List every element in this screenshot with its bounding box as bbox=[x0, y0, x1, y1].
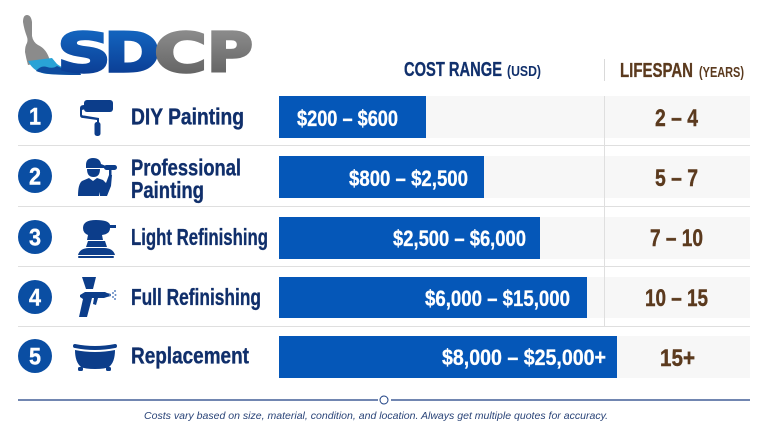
logo letter D: D bbox=[104, 22, 160, 84]
row 4: Full Refinishing bbox=[18, 277, 708, 318]
lifespan value: 5 – 7 bbox=[655, 165, 698, 192]
number badge 5: 5 bbox=[29, 344, 41, 370]
label bbox=[131, 154, 241, 203]
logo letter P: P bbox=[207, 22, 253, 84]
cost bar bbox=[279, 96, 426, 138]
icon: spray gun bbox=[79, 277, 116, 317]
cost bar bbox=[279, 217, 540, 259]
heading: cost range: (USD) bbox=[507, 63, 541, 80]
label: DIY Painting bbox=[131, 104, 244, 130]
cost bar: $200 – $600 bbox=[297, 106, 398, 131]
lifespan value: 10 – 15 bbox=[645, 285, 708, 312]
label: Painting bbox=[131, 177, 204, 203]
row 3: Light Refinishing bbox=[18, 217, 703, 259]
cost bar: $6,000 – $15,000 bbox=[425, 286, 570, 311]
logo letter C: C bbox=[154, 22, 207, 84]
label: Professional bbox=[131, 154, 241, 180]
heading: lifespan: (YEARS) bbox=[699, 64, 744, 81]
number badge 3 bbox=[18, 220, 52, 254]
number badge 4: 4 bbox=[29, 284, 42, 312]
label: Replacement bbox=[131, 342, 249, 368]
number badge 1 bbox=[18, 99, 52, 133]
cost bar bbox=[279, 156, 484, 198]
cost bar: $800 – $2,500 bbox=[349, 166, 468, 191]
icon: paint roller bbox=[80, 100, 113, 136]
number badge 2: 2 bbox=[29, 164, 41, 190]
number badge 4 bbox=[18, 280, 52, 314]
cost bar bbox=[279, 277, 587, 318]
cost bar: $2,500 – $6,000 bbox=[393, 226, 526, 251]
label: Full Refinishing bbox=[131, 284, 261, 310]
number badge 5 bbox=[18, 339, 52, 373]
cost bar: $8,000 – $25,000+ bbox=[442, 345, 606, 370]
heading: cost range: COST RANGE bbox=[404, 59, 502, 81]
logo letter S: S bbox=[57, 22, 111, 84]
heading: lifespan: LIFESPAN bbox=[620, 60, 693, 82]
number badge 2 bbox=[18, 159, 52, 193]
lifespan value: 15+ bbox=[660, 345, 695, 372]
cost bar bbox=[279, 336, 617, 378]
number badge 1: 1 bbox=[29, 104, 41, 130]
row 2: Professional Painting bbox=[18, 154, 698, 203]
icon: bathtub bbox=[73, 344, 117, 371]
lifespan value: 2 – 4 bbox=[655, 105, 699, 132]
icon: orbital sander bbox=[78, 220, 116, 258]
logo: SDCP bbox=[23, 15, 253, 84]
icon: painter bbox=[78, 158, 117, 196]
number badge 3: 3 bbox=[29, 224, 41, 252]
lifespan value: 7 – 10 bbox=[650, 225, 703, 252]
row 1: DIY Painting bbox=[18, 96, 699, 138]
footnote: Costs vary based on size, material, condition, and location. Always get multiple quotes for accuracy. bbox=[144, 410, 608, 422]
row 5: Replacement bbox=[18, 336, 695, 378]
label: Light Refinishing bbox=[131, 224, 268, 250]
icon: paint brush bbox=[23, 15, 81, 75]
